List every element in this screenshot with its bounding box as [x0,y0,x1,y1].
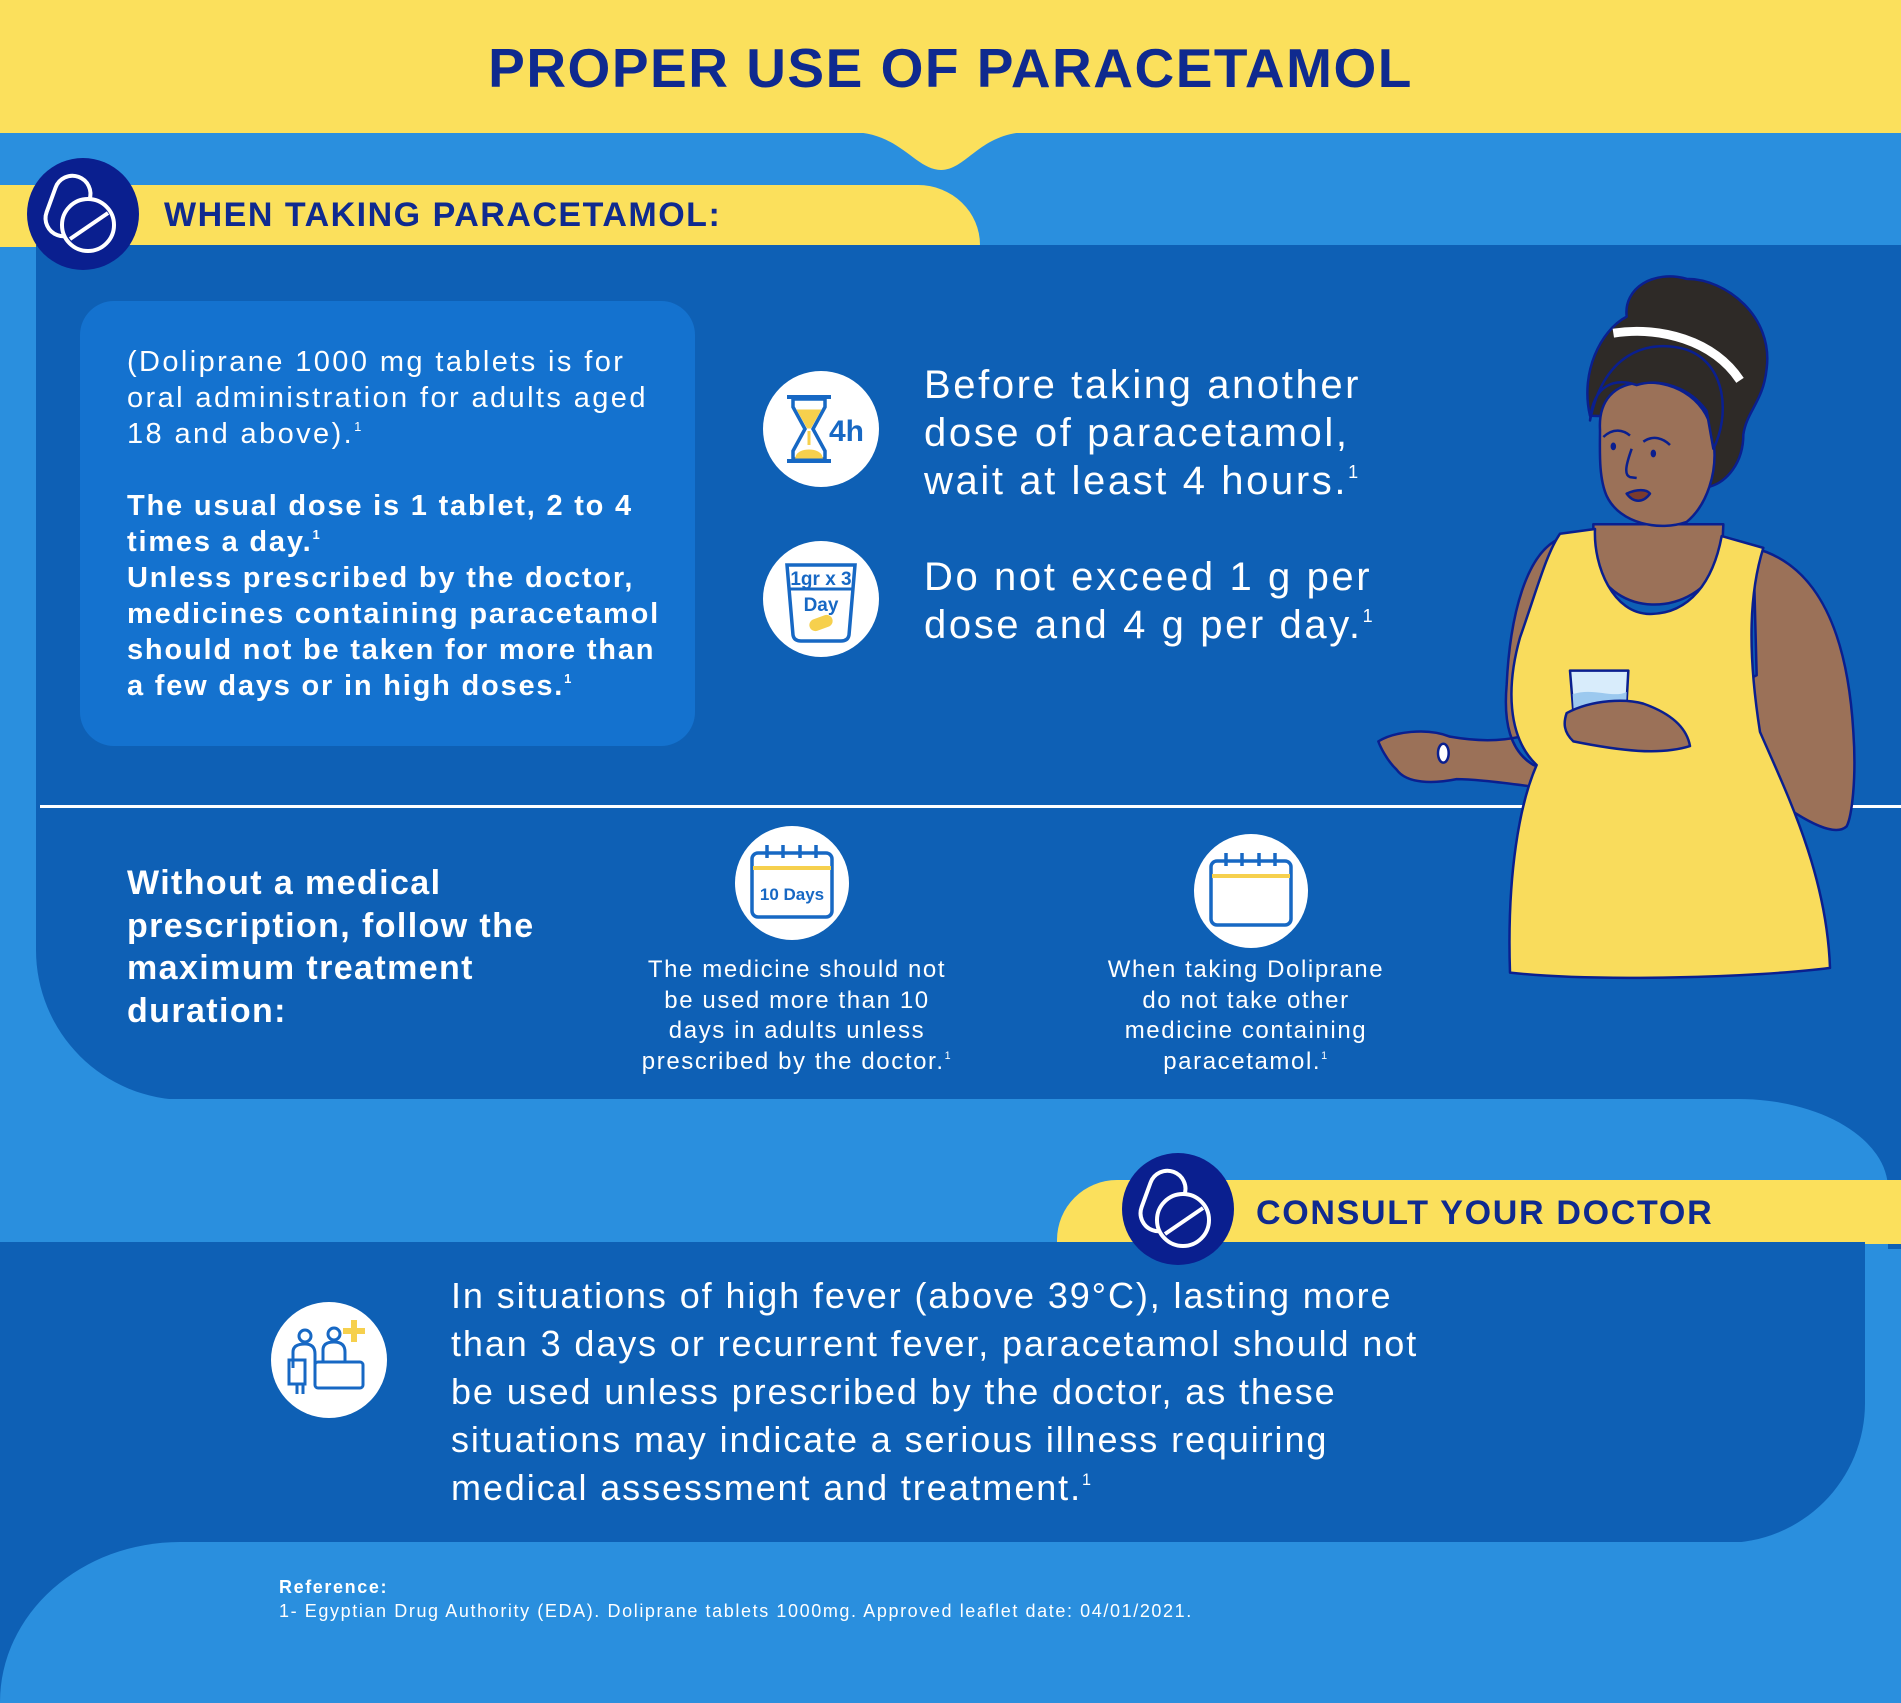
title: PROPER USE OF PARACETAMOL [488,37,1413,99]
text: wait 4 hours: wait at least 4 hours.1 [924,459,1361,503]
text: without prescription: Without a medical [127,864,441,902]
divider line [40,805,1901,808]
text: without prescription: prescription, follow the [127,906,535,944]
text box: dosage info: times a day.1 [127,526,322,558]
text box: dosage info: 18 and above).1 [127,418,364,450]
text box: dosage info: should not be taken for more than [127,634,655,666]
text: wait 4 hours: Before taking another [924,363,1361,407]
reference: Reference: [279,1577,388,1597]
heading: consult your doctor: CONSULT YOUR DOCTOR [1256,1194,1713,1232]
text: wait 4 hours [924,363,1361,503]
panel: consult [0,1242,1865,1543]
text: without prescription: duration: [127,992,287,1030]
left dark strip bottom [0,1500,250,1703]
text box: dosage info [80,301,695,746]
text: do not exceed: Do not exceed 1 g per [924,555,1372,599]
bottom light area [0,1542,1901,1703]
header notch [864,133,1016,170]
text box: dosage info: (Doliprane 1000 mg tablets is for [127,346,625,378]
caption: other medicine: medicine containing [1125,1017,1367,1044]
text: wait 4 hours: dose of paracetamol, [924,411,1350,455]
caption: other medicine: paracetamol.1 [1163,1048,1329,1074]
text: consult paragraph: than 3 days or recurrent fever, paracetamol should not [451,1323,1418,1364]
panel: when taking [36,245,1901,1100]
section tab: consult [1057,1180,1901,1244]
reference: 1- Egyptian Drug Authority (EDA). Doliprane tablets 1000mg. Approved leaflet date: 04/01/2021. [279,1601,1193,1621]
caption: 10 days: be used more than 10 [664,986,930,1014]
caption: other medicine: do not take other [1142,986,1350,1014]
reference [279,1577,1193,1621]
icon: pill badge [27,158,139,270]
icon: doctor consultation [271,1302,387,1418]
text: consult paragraph: medical assessment and treatment.1 [451,1467,1093,1508]
header band [0,0,1901,133]
text: do not exceed: dose and 4 g per day.1 [924,603,1375,647]
icon: calendar 10 days: 10 Days [760,885,824,904]
text: consult paragraph: situations may indicate a serious illness requiring [451,1419,1328,1460]
text: without prescription [127,864,535,1030]
caption: other medicine [1108,956,1384,1074]
illustration: woman with glass and pill [1377,275,1856,980]
icon: calendar 10 days [735,826,849,940]
text: consult paragraph: be used unless prescribed by the doctor, as these [451,1371,1337,1412]
icon: hourglass 4h: 4h [829,415,864,448]
text: consult paragraph: In situations of high fever (above 39°C), lasting more [451,1275,1392,1316]
icon: pill badge consult [1122,1153,1234,1265]
text box: dosage info: oral administration for adults aged [127,382,648,414]
text: consult paragraph [451,1275,1418,1508]
heading: when taking: WHEN TAKING PARACETAMOL: [164,196,721,234]
right strip behind bulge [1700,1099,1901,1249]
text box: dosage info: medicines containing paracetamol [127,598,660,630]
light blue bulge [0,1099,1888,1249]
icon: 1gr x 3 day cup: 1gr x 3 [790,569,852,590]
text box: dosage info: Unless prescribed by the doctor, [127,562,634,594]
text: do not exceed [924,555,1375,647]
caption: 10 days [642,956,952,1074]
text box: dosage info: The usual dose is 1 tablet, 2 to 4 [127,490,633,522]
section tab: when taking [0,185,980,247]
icon: 1gr x 3 day cup [763,541,879,657]
text: without prescription: maximum treatment [127,949,474,987]
caption: other medicine: When taking Doliprane [1108,956,1384,983]
icon: hourglass 4h [763,371,879,487]
icon: 1gr x 3 day cup: Day [804,595,839,616]
caption: 10 days: days in adults unless [669,1017,925,1044]
icon: calendar blank [1194,834,1308,948]
text box: dosage info: a few days or in high doses.1 [127,670,573,702]
caption: 10 days: prescribed by the doctor.1 [642,1048,952,1074]
caption: 10 days: The medicine should not [648,956,946,983]
